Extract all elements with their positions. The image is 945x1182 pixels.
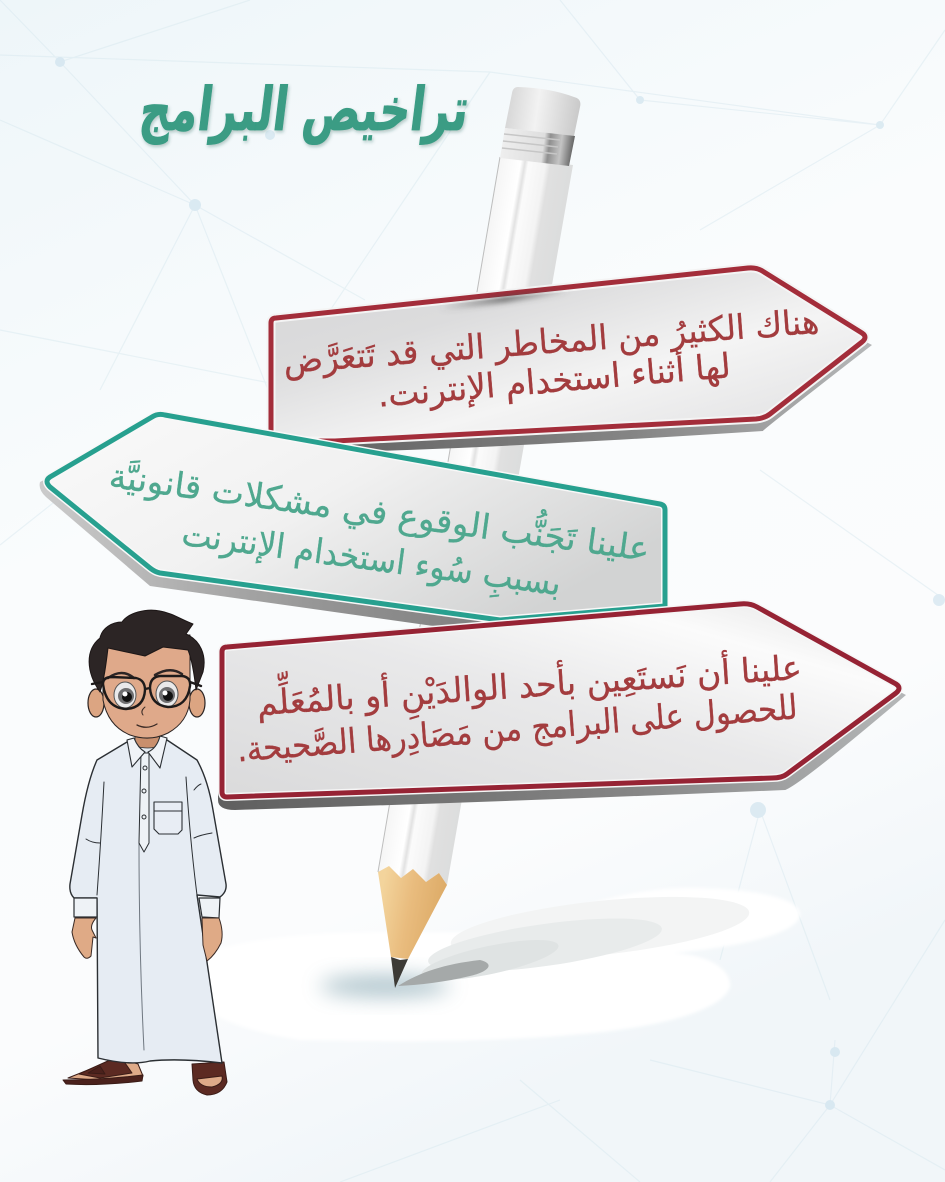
sign 1 line 1: هناك الكثيرُ من المخاطر التي قد تَتعَرَّض xyxy=(282,302,820,382)
right ear xyxy=(189,689,205,717)
eyebrows xyxy=(108,670,182,678)
collar xyxy=(127,736,167,768)
left ear xyxy=(88,689,104,717)
left sandal xyxy=(63,1060,143,1085)
sign 2 side thickness xyxy=(40,420,665,634)
sign 2 text xyxy=(107,451,653,607)
thobe center seam xyxy=(139,843,144,1050)
placket and buttons xyxy=(139,753,149,852)
sign 2 border xyxy=(47,414,665,620)
sign 3 line 1: علينا أن نَستَعِين بأحد الوالدَيْنِ أو بالمُعَلِّم xyxy=(255,638,803,730)
pencil ferrule xyxy=(500,128,575,166)
pencil left edge line xyxy=(378,157,500,872)
sign 1 border xyxy=(271,268,865,441)
pocket xyxy=(154,802,182,834)
sign 1 side thickness xyxy=(280,285,872,452)
sign 1 face xyxy=(271,268,865,441)
sleeve lines xyxy=(86,777,212,895)
pencil xyxy=(378,87,580,988)
pencil lead xyxy=(391,957,408,988)
hair xyxy=(89,610,204,692)
nose xyxy=(142,707,145,715)
sign 2 line 2: بسببِ سُوء استخدام الإنترنت xyxy=(179,514,563,607)
left cuff xyxy=(74,898,97,917)
sign 3 face xyxy=(222,604,899,797)
right cuff xyxy=(199,898,220,918)
sign 3 side thickness xyxy=(218,615,906,810)
white swoosh under pencil xyxy=(179,888,800,1041)
boy character xyxy=(63,610,227,1095)
pencil body xyxy=(378,157,573,885)
pencil cast shadow xyxy=(320,885,752,997)
sign 3 border xyxy=(222,604,899,797)
sign 1: red arrow pointing right xyxy=(271,268,872,452)
title: تراخيص البرامج xyxy=(136,75,473,145)
neck xyxy=(135,732,160,748)
left eye xyxy=(114,682,136,708)
face xyxy=(103,635,190,738)
left hand xyxy=(72,918,96,958)
sign 1 text xyxy=(282,302,820,416)
sign 1 line 2: لها أثناء استخدام الإنترنت. xyxy=(376,343,732,416)
right sandal xyxy=(192,1062,227,1095)
mouth xyxy=(137,724,157,727)
sign 3: red arrow pointing right xyxy=(218,604,906,810)
right eye xyxy=(156,681,178,707)
right hand xyxy=(202,918,222,961)
pencil wood tip xyxy=(378,866,447,959)
sign 2: teal arrow pointing left xyxy=(40,414,665,634)
sign 3 text xyxy=(235,638,803,771)
pencil shadow on sign 1 xyxy=(440,287,570,311)
glasses xyxy=(92,676,201,709)
sign 3 line 2: للحصول على البرامج من مَصَادِرها الصَّحيحة. xyxy=(235,688,799,771)
sign 2 line 1: علينا تَجَنُّب الوقوع في مشكلات قانونيَّة xyxy=(107,451,653,570)
pencil eraser xyxy=(505,87,580,136)
sign 2 face xyxy=(47,414,665,620)
thobe body xyxy=(70,740,226,1063)
